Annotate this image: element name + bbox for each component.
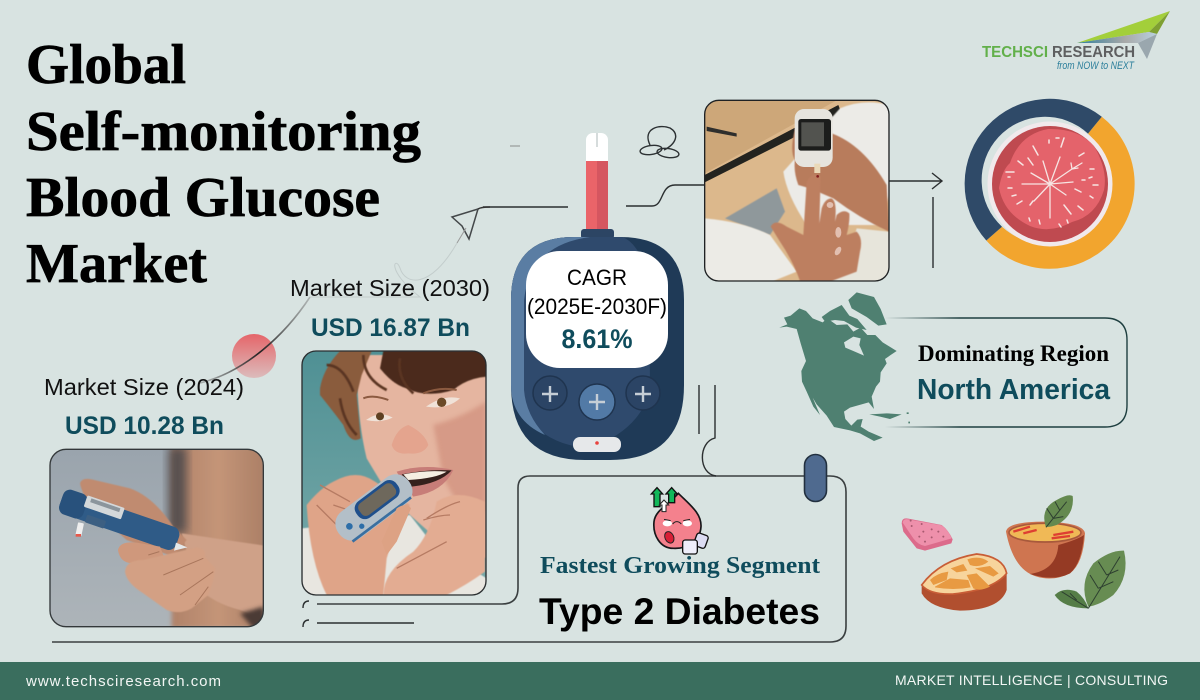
panel: dominating region — [885, 318, 1127, 427]
panel: fastest growing segment — [539, 454, 826, 632]
photo: finger prick with meter — [705, 100, 889, 281]
logo: TechSci Research — [982, 11, 1170, 72]
CAGR text: CAGR — [567, 265, 627, 290]
donut chart with blood cell — [965, 99, 1135, 269]
bread slice — [922, 554, 1007, 611]
title: Blood Glucose — [26, 167, 380, 229]
logo: TechSci Research: from NOW to NEXT — [1057, 60, 1135, 72]
leaf top — [1044, 495, 1073, 527]
title: Global — [26, 34, 186, 96]
meter screen — [526, 251, 668, 368]
test strip — [581, 133, 614, 240]
title — [26, 34, 421, 295]
glucose meter — [511, 133, 684, 460]
food illustration — [902, 495, 1126, 611]
candy piece — [902, 518, 953, 551]
title: Market — [26, 233, 207, 295]
footer — [0, 662, 1200, 700]
market size 2024 — [44, 374, 244, 440]
meter buttons — [533, 376, 660, 420]
CAGR text — [527, 265, 667, 354]
connector lines — [52, 146, 942, 642]
CAGR text: 8.61% — [562, 324, 632, 354]
logo: TechSci Research: RESEARCH — [1052, 44, 1135, 61]
map: North America — [779, 292, 910, 441]
panel: fastest growing segment: Type 2 Diabetes — [539, 591, 820, 632]
growth curve with ball and arrow — [200, 207, 490, 383]
swirl doodle — [639, 127, 680, 159]
market size 2030 — [290, 275, 490, 342]
market size 2024: USD 10.28 Bn — [65, 412, 224, 440]
connector pill — [804, 454, 826, 502]
leaves bottom — [1084, 551, 1126, 607]
photo: lancing pen in hand — [50, 447, 267, 628]
market size 2024: Market Size (2024) — [44, 374, 244, 400]
market size 2030: Market Size (2030) — [290, 275, 490, 301]
market size 2030: USD 16.87 Bn — [311, 314, 470, 342]
panel: dominating region: North America — [917, 374, 1111, 406]
logo: TechSci Research: TECHSCI — [982, 44, 1048, 61]
icon: blood drop with arrows — [651, 488, 709, 554]
bowl — [1006, 522, 1085, 579]
photo: child with glucose meter — [302, 351, 487, 595]
CAGR text: (2025E-2030F) — [527, 294, 667, 319]
footer: MARKET INTELLIGENCE | CONSULTING — [895, 672, 1168, 688]
panel: dominating region: Dominating Region — [918, 341, 1109, 366]
title: Self-monitoring — [26, 101, 421, 163]
panel: fastest growing segment: Fastest Growing Segment — [540, 553, 820, 579]
footer: www.techsciresearch.com — [25, 673, 221, 690]
meter body — [511, 237, 684, 460]
